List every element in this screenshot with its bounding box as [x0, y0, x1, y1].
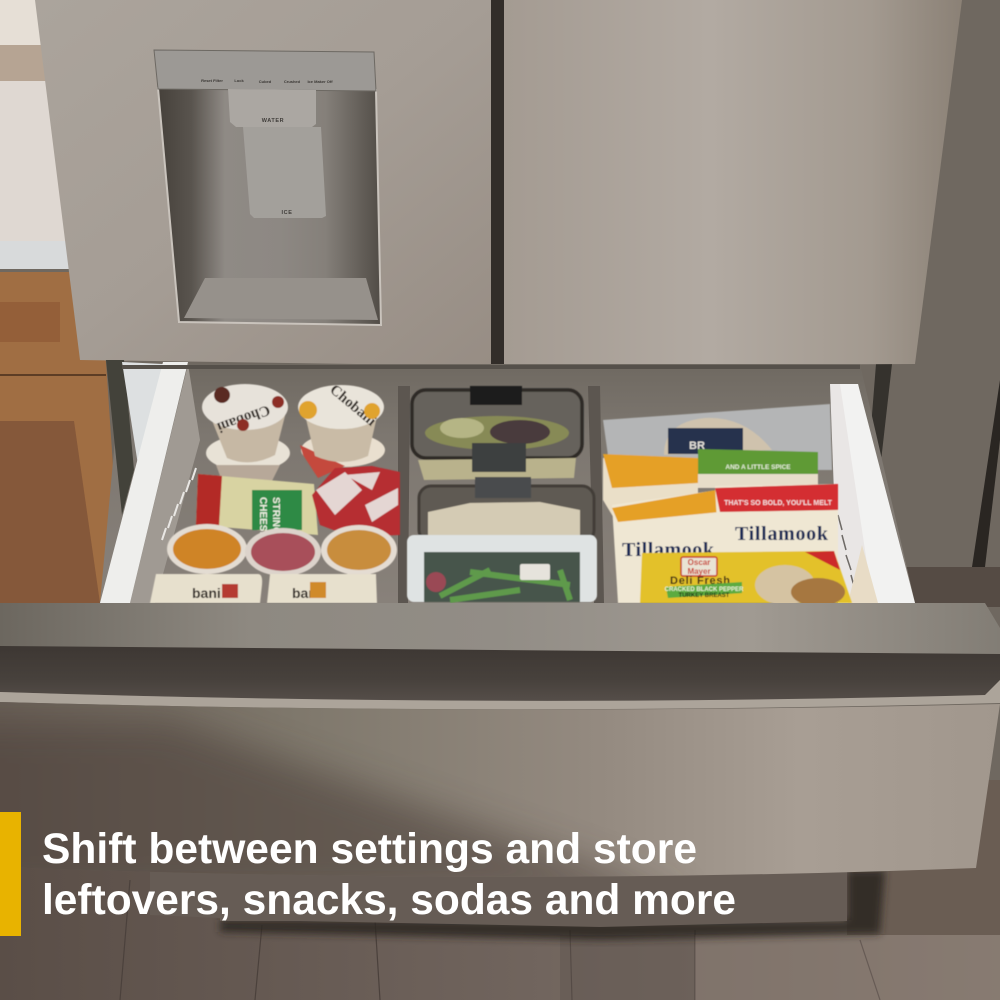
yogurt cups rear left — [202, 384, 290, 481]
oscar mayer pack: Mayer — [687, 567, 711, 576]
refrigerator right door — [504, 0, 962, 366]
open drawer interior — [100, 360, 915, 603]
floor — [0, 780, 1000, 1000]
ice paddle: ICE — [282, 210, 292, 216]
glass container: potato salad — [419, 477, 594, 542]
yogurt cups rear left: Chobani — [215, 401, 272, 435]
handle recess — [0, 646, 1000, 701]
oscar mayer pack — [640, 551, 852, 606]
headline: Shift between settings and store — [42, 825, 697, 873]
tillamook pack front right: THAT'S SO BOLD, YOU'LL MELT — [724, 500, 833, 507]
handle trim — [0, 680, 1000, 709]
glass container: salad — [412, 386, 582, 480]
fruit cup orange — [167, 524, 247, 574]
oscar mayer pack: CRACKED BLACK PEPPER — [665, 587, 744, 593]
left white rim — [100, 362, 188, 603]
ice paddle — [243, 127, 326, 218]
right white rim — [840, 384, 915, 603]
fruit cup peach — [321, 525, 397, 575]
food items — [150, 382, 852, 606]
control panel — [154, 50, 376, 91]
dispenser — [154, 50, 381, 325]
drawer front — [0, 603, 1000, 900]
right vents — [838, 515, 855, 590]
drip tray — [184, 278, 378, 320]
front yogurt trays: bani — [192, 585, 221, 601]
tillamook pack rear: AND A LITTLE SPICE — [725, 464, 791, 471]
front panel shading — [0, 709, 656, 877]
string cheese pack: STRING — [270, 497, 281, 535]
yogurt cups rear right: Chobani — [326, 382, 379, 429]
control panel: Reset Filter — [201, 78, 223, 83]
refrigerator left door — [35, 0, 504, 366]
control panel: Ice Maker Off — [307, 79, 333, 84]
yogurt cups rear right — [298, 382, 385, 478]
dividers — [398, 386, 410, 603]
tillamook pack front right: Tillamook — [735, 523, 829, 545]
tillamook pack front left: Tillamook — [622, 539, 715, 561]
drawer base — [150, 860, 847, 927]
front panel — [0, 702, 1000, 877]
headline: leftovers, snacks, sodas and more — [42, 876, 736, 924]
clear deli bag: BR — [689, 440, 705, 452]
top band — [0, 603, 1000, 655]
tillamook pack rear — [603, 449, 818, 520]
oscar mayer pack: TURKEY BREAST — [679, 593, 730, 599]
left vents — [162, 468, 196, 540]
string cheese pack — [196, 474, 318, 538]
water paddle — [228, 89, 316, 127]
front yogurt trays: bani — [292, 585, 321, 601]
accent bar — [0, 812, 21, 936]
netted cheese bag — [312, 466, 400, 537]
control panel: Lock — [234, 78, 244, 83]
clear deli bag — [603, 404, 832, 470]
oscar mayer pack: Oscar — [688, 558, 710, 567]
front yogurt trays — [150, 574, 377, 603]
left inner wall — [130, 364, 200, 603]
string cheese pack: CHEESE — [257, 497, 268, 538]
control panel: Crushed — [284, 79, 301, 84]
tillamook pack front right — [715, 484, 838, 580]
drawer shadow on floor — [220, 870, 885, 940]
fruit cup red — [245, 528, 321, 576]
control panel: Cubed — [259, 79, 272, 84]
tillamook pack front left — [612, 490, 720, 603]
oscar mayer pack: Deli Fresh — [670, 575, 730, 587]
container: green beans with white lid — [407, 535, 597, 602]
door gap — [491, 0, 504, 366]
right inner wall — [830, 384, 900, 603]
lid clips — [470, 386, 522, 405]
dispenser recess — [158, 88, 381, 325]
water paddle: WATER — [262, 118, 284, 124]
headline — [42, 825, 736, 924]
